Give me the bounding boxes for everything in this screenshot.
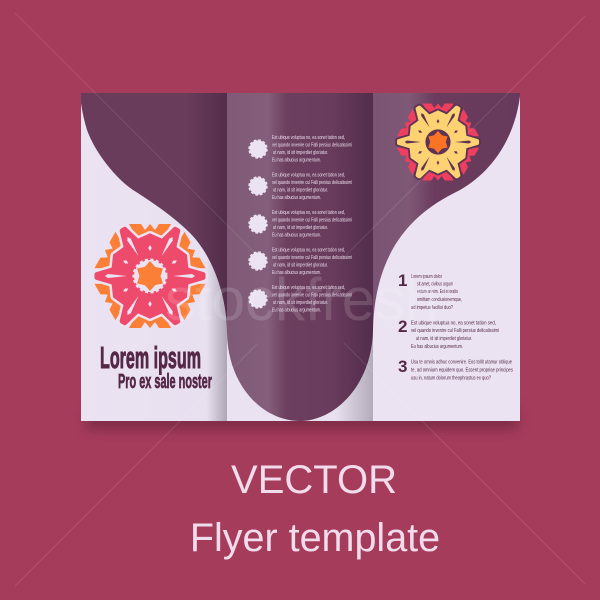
numbered item 2: vel quando invenire cul Falli persius delicatissimi bbox=[411, 328, 499, 334]
bullet item 5: ut nam, id sit imperdiet gloriatur. bbox=[273, 300, 328, 306]
purple curved band bbox=[81, 93, 520, 421]
numbered item 3: te, ad omnium equidem quo. Essent propriae principes bbox=[411, 368, 513, 374]
numbered item 1: omittam conclusionemque, bbox=[417, 297, 462, 303]
list: centre panel bullets bbox=[249, 135, 352, 314]
numbered item 2 bbox=[398, 317, 499, 350]
title: VECTOR: VECTOR bbox=[231, 458, 397, 502]
bullet item 1: vel quando invenire cul Falli persius delicatissimi bbox=[272, 142, 352, 148]
numbered item 3: 3 bbox=[398, 357, 407, 376]
bullet item 5: Est ubique voluptua no, ea sonet tation sed, bbox=[272, 285, 345, 291]
icon: large mandala bbox=[94, 220, 206, 332]
numbered item 3: Usu te omnis adhuc convenire. Eos tollit utamur oblique bbox=[411, 360, 512, 366]
list: right panel numbered bbox=[398, 271, 513, 382]
bullet item 1: Eu has albucius argumentum. bbox=[272, 158, 321, 164]
bullet item 2: Eu has albucius argumentum. bbox=[272, 195, 321, 201]
bullet item 1: Est ubique voluptua no, ea sonet tation sed, bbox=[272, 135, 345, 141]
bullet item 3: vel quando invenire cul Falli persius delicatissimi bbox=[272, 218, 352, 224]
bullet item 5: Eu has albucius argumentum. bbox=[272, 308, 321, 314]
panel: right paper bbox=[373, 93, 520, 421]
bullet item 4: Eu has albucius argumentum. bbox=[272, 270, 321, 276]
icon: small mandala bbox=[397, 101, 479, 183]
bullet item 3 bbox=[249, 210, 352, 238]
bullet item 2 bbox=[249, 172, 352, 201]
bullet item 4: Est ubique voluptua no, ea sonet tation sed, bbox=[272, 248, 345, 254]
panel: left paper bbox=[81, 93, 227, 421]
bullet item 5: vel quando invenire cul Falli persius delicatissimi bbox=[272, 292, 352, 298]
bullet item 1: ut nam, id sit imperdiet gloriatur. bbox=[273, 150, 328, 156]
bullet item 4: ut nam, id sit imperdiet gloriatur. bbox=[273, 262, 328, 268]
numbered item 1: entum an vim. Est ei oratio bbox=[417, 289, 458, 295]
flyer bbox=[81, 93, 520, 421]
bullet item 2: ut nam, id sit imperdiet gloriatur. bbox=[273, 188, 328, 194]
numbered item 1: Lorem ipsum dolor bbox=[411, 274, 442, 280]
bullet item 3: ut nam, id sit imperdiet gloriatur. bbox=[273, 225, 328, 231]
bullet item 2: Est ubique voluptua no, ea sonet tation sed, bbox=[272, 172, 345, 178]
bullet item 4: vel quando invenire cul Falli persius delicatissimi bbox=[272, 255, 352, 261]
subtitle: Flyer template: Flyer template bbox=[190, 516, 440, 560]
heading: Lorem ipsum: Lorem ipsum bbox=[100, 340, 201, 375]
numbered item 2: ut nam, id sit imperdiet gloriatur. bbox=[416, 336, 472, 342]
flyer drop shadow bbox=[86, 408, 518, 430]
numbered item 3 bbox=[398, 357, 513, 382]
watermark: stockfresh bbox=[165, 266, 438, 333]
bullet item 3: Est ubique voluptua no, ea sonet tation sed, bbox=[272, 210, 345, 216]
bullet item 1 bbox=[249, 135, 352, 164]
bullet item 2: vel quando invenire cul Falli persius delicatissimi bbox=[272, 180, 352, 186]
bullet item 5 bbox=[249, 285, 352, 314]
numbered item 2: Est ubique voluptua no, ea sonet tation sed, bbox=[411, 320, 496, 326]
numbered item 1: ad impetus facilisi duo? bbox=[411, 305, 453, 311]
numbered item 1: sit amet, civibus argum bbox=[417, 282, 453, 288]
numbered item 2: Eu has albucius argumentum. bbox=[411, 344, 463, 350]
bullet item 3: Eu has albucius argumentum. bbox=[272, 232, 321, 238]
panel: centre paper bbox=[227, 93, 373, 421]
subheading: Pro ex sale noster bbox=[118, 371, 212, 393]
bullet item 4 bbox=[249, 248, 352, 276]
numbered item 3: usu in, natum dolorum theophrastus ex quo? bbox=[411, 376, 491, 382]
numbered item 2: 2 bbox=[398, 317, 407, 336]
numbered item 1: 1 bbox=[398, 271, 407, 290]
numbered item 1 bbox=[398, 271, 462, 311]
